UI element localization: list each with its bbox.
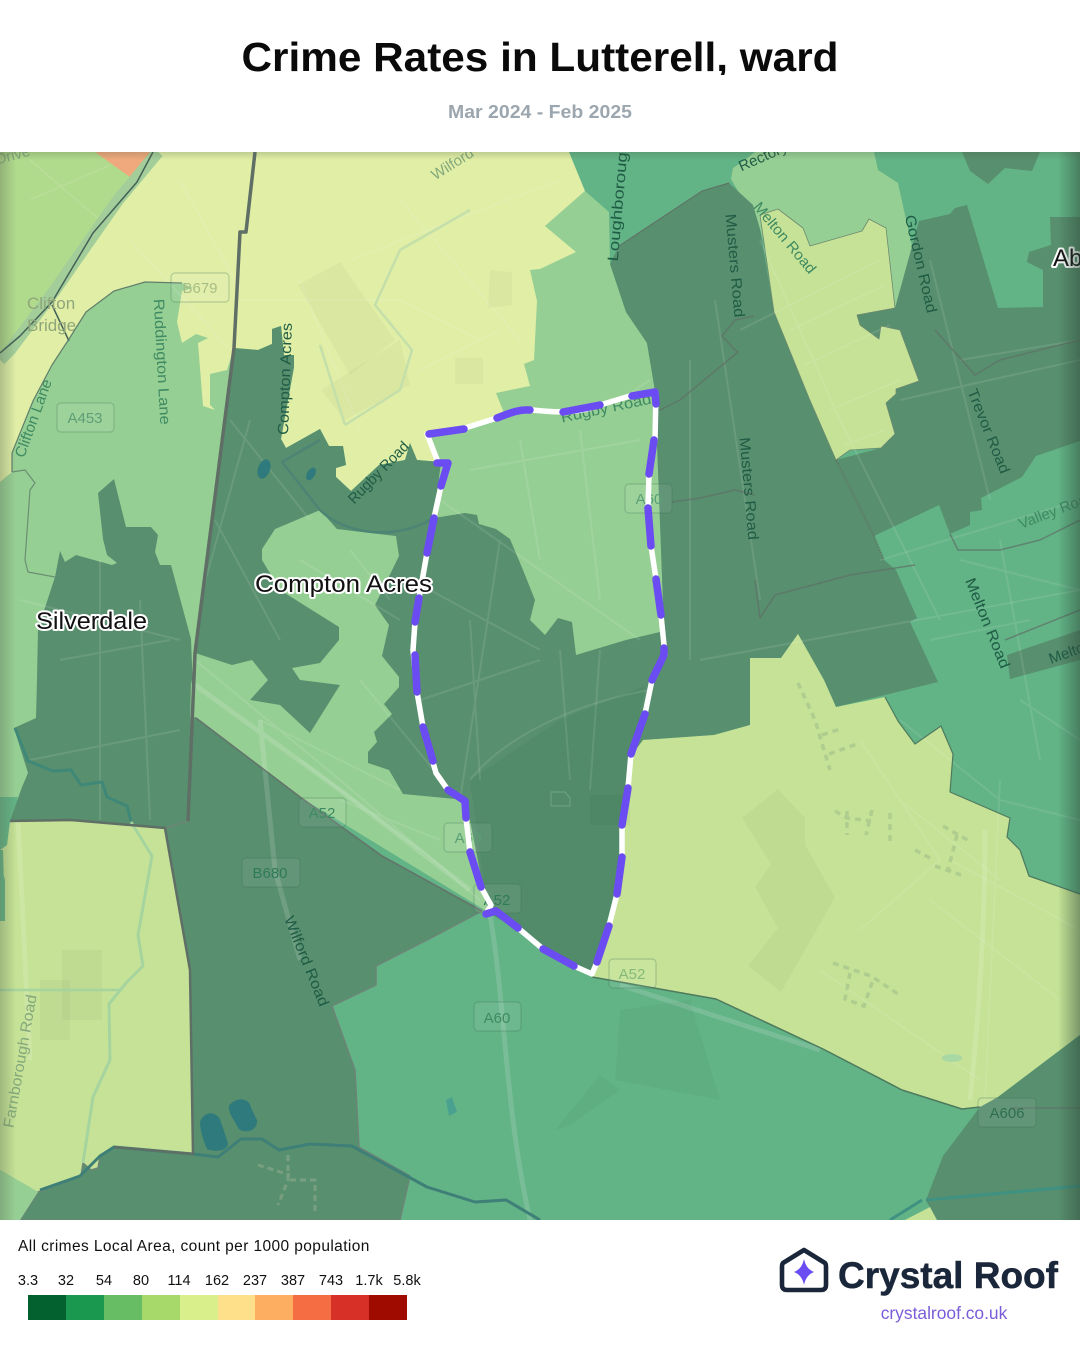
area: light green ward north [427,191,665,655]
area: yellow-green Musters block [760,209,919,460]
legend values: 387 [281,1273,305,1289]
label: Compton Acres road: Compton Acres [275,323,296,435]
label: Musters Road south: Musters Road [736,437,761,541]
logo: Crystal Roof [780,1248,1058,1323]
area: light green Compton lobe [262,510,440,704]
badge: A52 west: A52 [309,805,335,822]
map edge shading [0,152,1080,1220]
badge: B679 [171,273,229,302]
area: dark north pocket [962,152,1040,184]
legend values: 743 [319,1273,343,1289]
label: Melton Road north: Melton Road [750,199,819,277]
rivers [0,152,1080,1220]
estate paths south [258,1155,315,1215]
area: pale south corner [905,1207,937,1220]
legend values: 237 [243,1273,267,1289]
roads [20,160,1080,1100]
area: orange corner [95,152,153,182]
base layer: mid green areas [0,152,1080,1220]
area: yellow-green east [592,634,1080,1110]
badge: A606 [978,1098,1036,1127]
place name: Compton Acres: Compton Acres [255,571,432,598]
legend values: 80 [133,1273,149,1289]
area: light green A52 strip [193,650,488,912]
label: Trevor Road: Trevor Road [963,386,1013,476]
badge: A453 [57,403,114,432]
area: top-left yellow-green [0,152,153,353]
area: light green north of yellow block [731,152,925,330]
boundary lines [0,152,1080,1154]
ward boundary: Lutterell [413,392,665,974]
area: mid green left pieces [0,797,18,850]
badge: A60 ward west: A60 [455,830,481,847]
area: dark Silverdale [10,479,193,828]
badge: B679: B679 [182,280,218,297]
badge: A60 ward west [444,823,492,852]
label: Clifton Bridge: Bridge [27,316,76,335]
label: Melton Road east: Melton Road [961,576,1013,671]
area: dark Melton band [1007,630,1080,679]
river: Fairham brook [40,1139,540,1220]
legend values [18,1273,421,1289]
label: Musters Road north: Musters Road [721,213,747,318]
area: dark south-east [926,1035,1080,1220]
river: Silverdale stream [15,728,131,821]
stream: Compton [282,440,430,532]
badge: A60 ward east [625,484,672,513]
icon: house with star [780,1248,828,1292]
area: dark Wilford [20,718,482,1220]
badge: B680 [242,858,300,887]
badge: A52 junction [474,884,521,913]
stream: pale area [320,210,470,425]
legend values: 162 [205,1273,229,1289]
subtitle: date range: Mar 2024 - Feb 2025 [448,102,632,122]
river: edge of Clifton [0,152,158,360]
river: stream in south-west [83,822,152,1163]
website url: crystalroof.co.uk [881,1303,1007,1323]
area: light green west [0,260,240,800]
label: Gordon Road: Gordon Road [901,213,940,315]
label: Wilford Road: Wilford Road [280,914,332,1009]
area: bottom-left light green [0,1170,38,1220]
label: Clifton Lane: Clifton Lane [12,377,56,460]
legend values: 1.7k [355,1273,383,1289]
label: Rugby Road west: Rugby Road [345,438,413,508]
legend values: 32 [58,1273,74,1289]
lakes [200,458,962,1151]
legend [18,1238,421,1320]
badge: A60 south [474,1002,521,1031]
legend values: 54 [96,1273,112,1289]
area: darker lower ward [470,686,645,975]
legend title: All crimes Local Area, count per 1000 population [18,1238,370,1255]
road number badges [57,273,1036,1127]
estate paths [798,683,971,1006]
label: Rugby Road ward: Rugby Road [559,391,653,426]
place name: Silverdale: Silverdale [36,608,147,635]
legend values: 3.3 [18,1273,38,1289]
badge: A606: A606 [989,1105,1025,1122]
major roads [18,685,985,1220]
label: Farnborough Road: Farnborough Road [0,993,41,1129]
badge: A60 south: A60 [484,1010,510,1027]
building outline in ward [551,792,570,806]
area: pale yellow centre-west [0,152,585,491]
area: dark ward interior [368,513,670,975]
ward outline white [413,392,665,974]
badge: A52 west [299,798,346,827]
badge: A52 south: A52 [619,966,645,983]
map [0,152,1080,1220]
legend values: 114 [167,1273,191,1289]
label: Loughborough Road: Loughborough [605,152,632,262]
legend values: 5.8k [393,1273,421,1289]
road labels [0,138,1080,1129]
ward outline purple dashes [415,392,664,966]
legend colour scale [28,1295,407,1320]
badge: A453: A453 [67,410,103,427]
badge: A52 junction: A52 [484,892,510,909]
wordmark: Crystal Roof [838,1255,1058,1296]
label: Ruddington Lane: Ruddington Lane [150,298,173,425]
choropleth areas [0,152,1080,1220]
area: dark Musters [610,183,938,740]
badge: A52 south [609,959,656,988]
area: dark Compton Acres [195,326,441,733]
label: Clifton Bridge: Clifton [27,294,75,313]
area: dark north-east [836,205,1080,536]
badge: A60 ward east: A60 [636,491,662,508]
area: yellow-green south-west [0,820,193,1192]
river: south-east [890,1186,1080,1220]
field blocks [40,262,835,1130]
badge: B680: B680 [252,865,288,882]
